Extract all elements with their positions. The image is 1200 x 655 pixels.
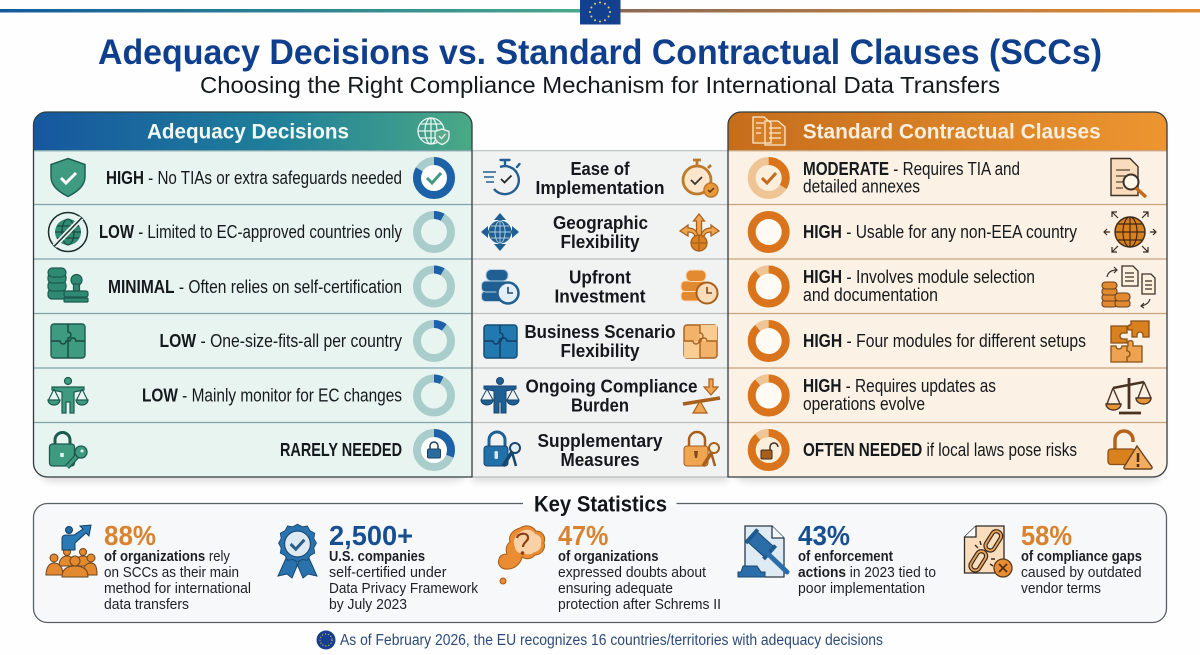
stat: 43 percent: 43% [798,520,850,551]
row: supplementary measures sccs: OFTEN NEEDED if local laws pose risks [803,440,1077,460]
stat: 2,500+: U.S. companies [329,548,425,565]
criterion: ongoing compliance burden: Ongoing Compliance [526,376,698,396]
panel: criteria column [472,150,728,478]
row: business scenario adequacy: LOW - One-size-fits-all per country [160,331,402,351]
icon: globe with shield [418,118,449,144]
row: ongoing compliance adequacy [48,378,451,413]
criterion: upfront investment: Upfront [569,266,631,288]
row: ongoing compliance adequacy: LOW - Mainly monitor for EC changes [142,386,402,406]
criterion: supplementary measures: Measures [560,449,640,470]
stat: 88 percent: of organizations rely [104,548,230,565]
criterion: geographic flexibility: Geographic [553,212,648,233]
icon: EU flag [580,0,620,24]
row: ongoing compliance sccs [752,376,1151,414]
row: upfront investment adequacy: MINIMAL - Often relies on self-certification [108,277,402,297]
stat: 43 percent: actions in 2023 tied to [798,564,936,581]
stat: 47 percent: expressed doubts about [558,564,707,581]
stat: 88 percent: data transfers [104,596,189,613]
stat: 58 percent: of compliance gaps [1021,548,1142,565]
panel: key statistics [34,492,1166,622]
stat: 88 percent: 88% [104,520,156,551]
row: business scenario sccs: HIGH - Four modules for different setups [803,331,1086,351]
criterion: geographic flexibility: Flexibility [560,231,640,252]
stat: 58 percent: caused by outdated [1021,564,1142,581]
row: supplementary measures sccs [752,431,1152,469]
criterion: ease of implementation: Implementation [536,177,664,198]
row: business scenario sccs [752,321,1149,362]
icon: EU circle [316,630,336,650]
heading: standard contractual clauses: Standard Contractual Clauses [803,120,1101,144]
row: geographic flexibility sccs: HIGH - Usable for any non-EEA country [803,222,1077,242]
stat: 43 percent [738,520,936,597]
stat: 88 percent: method for international [104,580,251,597]
row: upfront investment adequacy [48,268,451,304]
criterion: geographic flexibility [481,212,719,252]
stat: 43 percent: of enforcement [798,548,893,565]
stat: 58 percent: vendor terms [1021,580,1101,597]
stat: 2,500+: Data Privacy Framework [329,580,478,597]
criterion: ongoing compliance burden [481,376,720,416]
criterion: ease of implementation: Ease of [570,158,630,179]
row: supplementary measures adequacy [50,432,451,467]
stat: 2,500+: 2,500+ [329,520,413,551]
top accent bar right [620,9,1200,12]
criterion: business scenario flexibility: Flexibility [560,340,640,361]
criterion: supplementary measures [484,430,719,470]
row: supplementary measures adequacy: RARELY NEEDED [280,440,402,460]
stat: 88 percent [46,520,251,613]
title: Adequacy Decisions vs. Standard Contractual Clauses (SCCs) [98,33,1102,72]
stat: 47 percent [498,520,721,613]
panel: standard contractual clauses [728,112,1167,477]
criterion: supplementary measures: Supplementary [538,430,663,451]
stat: 88 percent: on SCCs as their main [104,564,239,581]
stat: 58 percent [964,520,1142,597]
icon: contract documents [753,117,785,145]
stat: 47 percent: ensuring adequate [558,580,673,597]
row: ongoing compliance sccs: operations evolve [803,394,925,414]
stat: 47 percent: protection after Schrems II [558,596,721,613]
stat: 47 percent: of organizations [558,548,658,565]
row: upfront investment sccs: and documentation [803,285,938,305]
row: upfront investment sccs [752,266,1155,308]
heading: adequacy decisions: Adequacy Decisions [147,120,349,144]
criterion: upfront investment [482,266,718,306]
row: ease of implementation sccs: detailed annexes [803,177,920,197]
heading: key statistics: Key Statistics [534,492,667,516]
row: ongoing compliance sccs: HIGH - Requires updates as [803,376,996,396]
row: ease of implementation sccs [752,158,1146,197]
row: geographic flexibility sccs [752,212,1156,252]
row: geographic flexibility adequacy [48,212,451,252]
row: geographic flexibility adequacy: LOW - Limited to EC-approved countries only [99,222,402,242]
panel: adequacy decisions [34,112,472,477]
row: business scenario adequacy [51,324,451,358]
row: ease of implementation sccs: MODERATE - Requires TIA and [803,159,1020,179]
stat: 2,500+: by July 2023 [329,596,407,613]
criterion: ease of implementation [483,158,718,198]
stat: 43 percent: poor implementation [798,580,925,597]
row: ease of implementation adequacy [51,158,451,196]
criterion: business scenario flexibility [484,321,717,361]
criterion: ongoing compliance burden: Burden [571,394,629,416]
criterion: business scenario flexibility: Business Scenario [524,321,676,342]
row: ease of implementation adequacy: HIGH - No TIAs or extra safeguards needed [106,168,402,188]
stat: 2,500+: self-certified under [329,564,446,581]
subtitle: Choosing the Right Compliance Mechanism for International Data Transfers [200,72,1000,98]
stat: 47 percent: 47% [558,520,609,551]
top accent bar left [0,9,580,12]
criterion: upfront investment: Investment [554,286,646,306]
panel shadows [38,120,1164,482]
stat: 58 percent: 58% [1021,520,1072,551]
row: upfront investment sccs: HIGH - Involves module selection [803,267,1035,287]
stat: 2,500+ [278,520,478,613]
footnote: As of February 2026, the EU recognizes 16 countries/territories with adequacy decisions [340,632,883,649]
